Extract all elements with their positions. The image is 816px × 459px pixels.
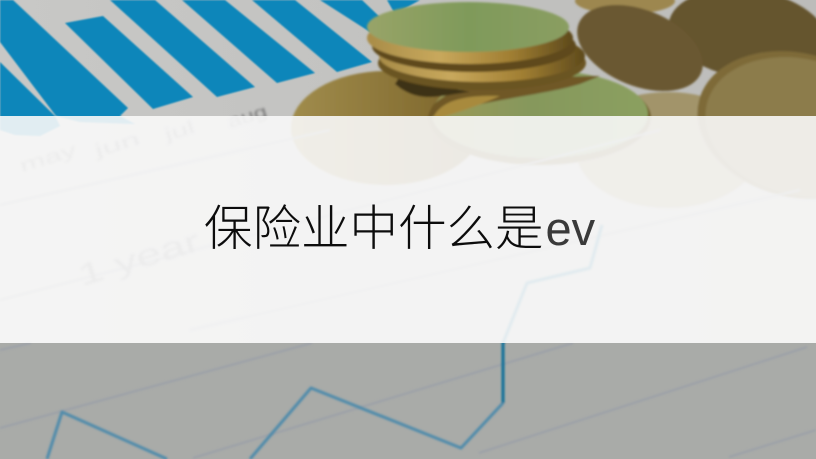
line chart: blue trend line — [47, 225, 602, 459]
axis labels in photo: may — [17, 140, 79, 176]
title: 保险业中什么是ev — [204, 202, 595, 256]
bar chart: blue bars — [0, 0, 420, 136]
axis labels in photo: aug — [225, 101, 269, 132]
axis labels in photo: jun — [90, 128, 142, 161]
coins: pile and scattered — [291, 0, 816, 219]
axis labels in photo — [17, 101, 269, 293]
translucent white title band — [0, 116, 816, 343]
axis labels in photo: 1 year — [74, 225, 204, 293]
axis labels in photo: jul — [161, 117, 197, 145]
line chart: grid lines — [0, 130, 816, 458]
